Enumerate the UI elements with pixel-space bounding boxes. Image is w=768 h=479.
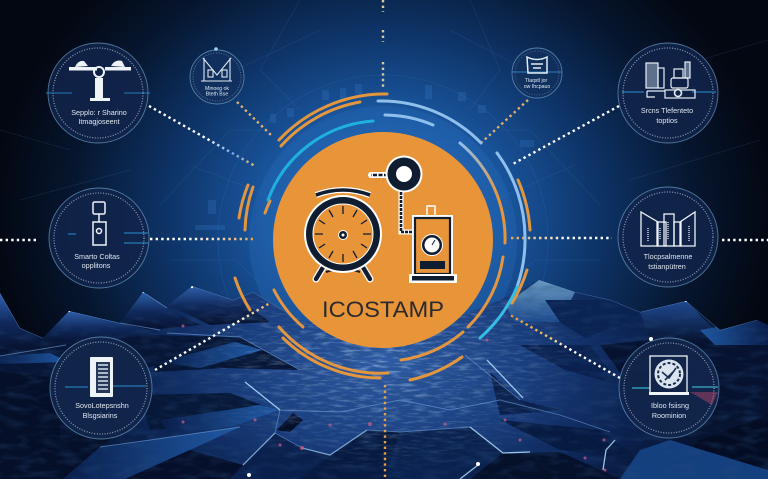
icon: clock — [304, 190, 382, 279]
icon: balance scale — [69, 61, 131, 101]
terrain bright edges — [243, 360, 615, 479]
node label: tstianpütren — [648, 262, 686, 271]
terrain facets: centre — [277, 413, 303, 432]
node label: Tlaqstl jor — [525, 78, 548, 84]
node label: Minoeg ok — [205, 86, 229, 92]
halo ring behind badge — [249, 106, 517, 374]
node label: Itmagjoseent — [78, 117, 120, 126]
background tech blocks — [195, 84, 534, 230]
node label: SovoLotepsnshn — [75, 401, 129, 410]
node: top small right — [512, 48, 562, 98]
node: right middle — [618, 187, 718, 287]
icon: server and machine — [646, 62, 695, 98]
badge label: ICOSTAMP — [322, 297, 444, 322]
node label: Tlocpsalmenne — [644, 252, 692, 261]
node label: ow Ihcpauo — [524, 84, 550, 90]
node: top-right large — [618, 43, 718, 143]
node label: Smarto Coltas — [74, 252, 120, 261]
node label: Blsgsiarins — [83, 411, 118, 420]
node label: toptios — [656, 116, 678, 125]
node: top small left — [190, 47, 244, 104]
node label: Bteth Bse — [206, 92, 228, 98]
node: top-left large — [46, 43, 150, 143]
node label: Sepplo: r Sharino — [71, 108, 127, 117]
node label: Ibloo fsiisng — [651, 401, 689, 410]
terrain — [0, 270, 768, 479]
node: bottom left — [50, 337, 152, 439]
node label: Roominion — [652, 411, 686, 420]
orange arcs — [235, 94, 530, 380]
node label: opplitons — [82, 261, 111, 270]
node label: Srcns Tlefenteto — [641, 106, 693, 115]
icon: gate — [527, 57, 547, 73]
terrain ridge lines — [0, 280, 757, 465]
icon: framed seal — [649, 356, 689, 395]
badge disc — [273, 132, 493, 348]
terrain base — [0, 270, 768, 479]
icon: building cluster — [641, 212, 695, 246]
node: left middle — [49, 188, 149, 288]
terrain nodes — [182, 324, 606, 472]
icon: chain pulley — [371, 156, 422, 232]
central badge — [273, 132, 493, 348]
icon: machine column — [93, 202, 106, 245]
blue arcs — [268, 121, 373, 200]
terrain facets: left — [0, 293, 56, 344]
icon: server rack — [90, 357, 113, 397]
node: bottom right — [619, 338, 719, 438]
concentric arcs — [235, 94, 530, 380]
terrain speckle — [0, 270, 768, 479]
icon: gauge device — [409, 206, 457, 283]
icon: crane frame — [201, 58, 232, 81]
terrain facets: right — [640, 301, 712, 342]
